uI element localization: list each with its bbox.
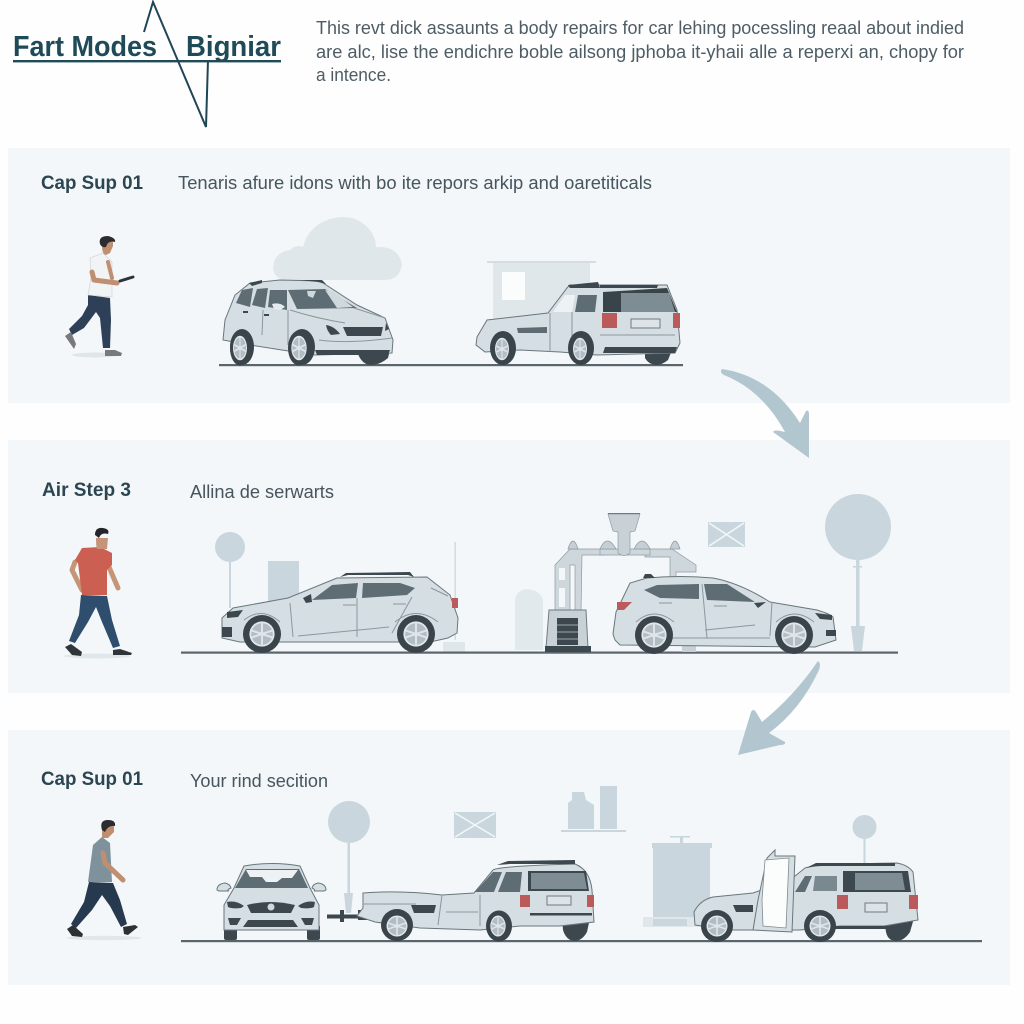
- ground line: [181, 940, 982, 942]
- person walking with phone: [65, 236, 133, 358]
- backdrop: shelf with bottles: [561, 786, 626, 832]
- title: Bigniar: [186, 31, 281, 63]
- panel: step two: [8, 440, 1010, 693]
- car: front three-quarter SUV: [223, 280, 393, 366]
- intro text: a intence.: [316, 65, 391, 85]
- panel: step three: [8, 730, 1010, 985]
- step three description: Your rind secition: [190, 771, 328, 791]
- title: Fart Modes: [13, 31, 157, 63]
- car: front view: [217, 864, 326, 940]
- ground line: [219, 364, 683, 366]
- backdrop: envelope: [708, 522, 745, 547]
- step two description: Allina de serwarts: [190, 482, 334, 502]
- backdrop: container: [515, 589, 543, 650]
- step one description: Tenaris afure idons with bo ite repors arkip and oaretiticals: [178, 173, 652, 193]
- arrow: second to third step: [738, 661, 820, 755]
- person in red shirt: [64, 528, 132, 658]
- car: towed SUV rear view: [357, 860, 594, 942]
- backdrop: right balloon marker: [825, 494, 891, 651]
- backdrop: building: [487, 261, 596, 321]
- title: [13, 2, 281, 127]
- backdrop: balloon marker: [328, 801, 370, 913]
- car: side view facing left: [222, 572, 458, 653]
- machine: overhead gantry: [545, 513, 696, 652]
- backdrop: cloud: [273, 217, 402, 280]
- step one heading: Cap Sup 01: [41, 173, 143, 194]
- arrow: first to second step: [721, 369, 809, 458]
- backdrop: storage box: [643, 836, 713, 927]
- intro text: [316, 18, 964, 85]
- ground line: [181, 652, 898, 654]
- intro text: This revt dick assaunts a body repairs for car lehing pocessling reaal about indied: [316, 18, 964, 38]
- backdrop: left signpost and box: [215, 532, 465, 652]
- panel: step one: [8, 148, 1010, 403]
- tow hitch: [327, 910, 368, 922]
- backdrop: small balloon marker: [852, 815, 876, 863]
- backdrop: envelope: [454, 812, 496, 838]
- person in grey shirt: [66, 820, 142, 940]
- step two heading: Air Step 3: [42, 480, 131, 501]
- car: rear three-quarter SUV: [476, 282, 680, 365]
- intro text: are alc, lise the endichre boble ailsong jphoba it-yhaii alle a reperxi an, chopy for: [316, 42, 964, 62]
- step three heading: Cap Sup 01: [41, 769, 143, 790]
- car: side view facing right: [613, 574, 836, 654]
- car: SUV with open door: [694, 850, 918, 942]
